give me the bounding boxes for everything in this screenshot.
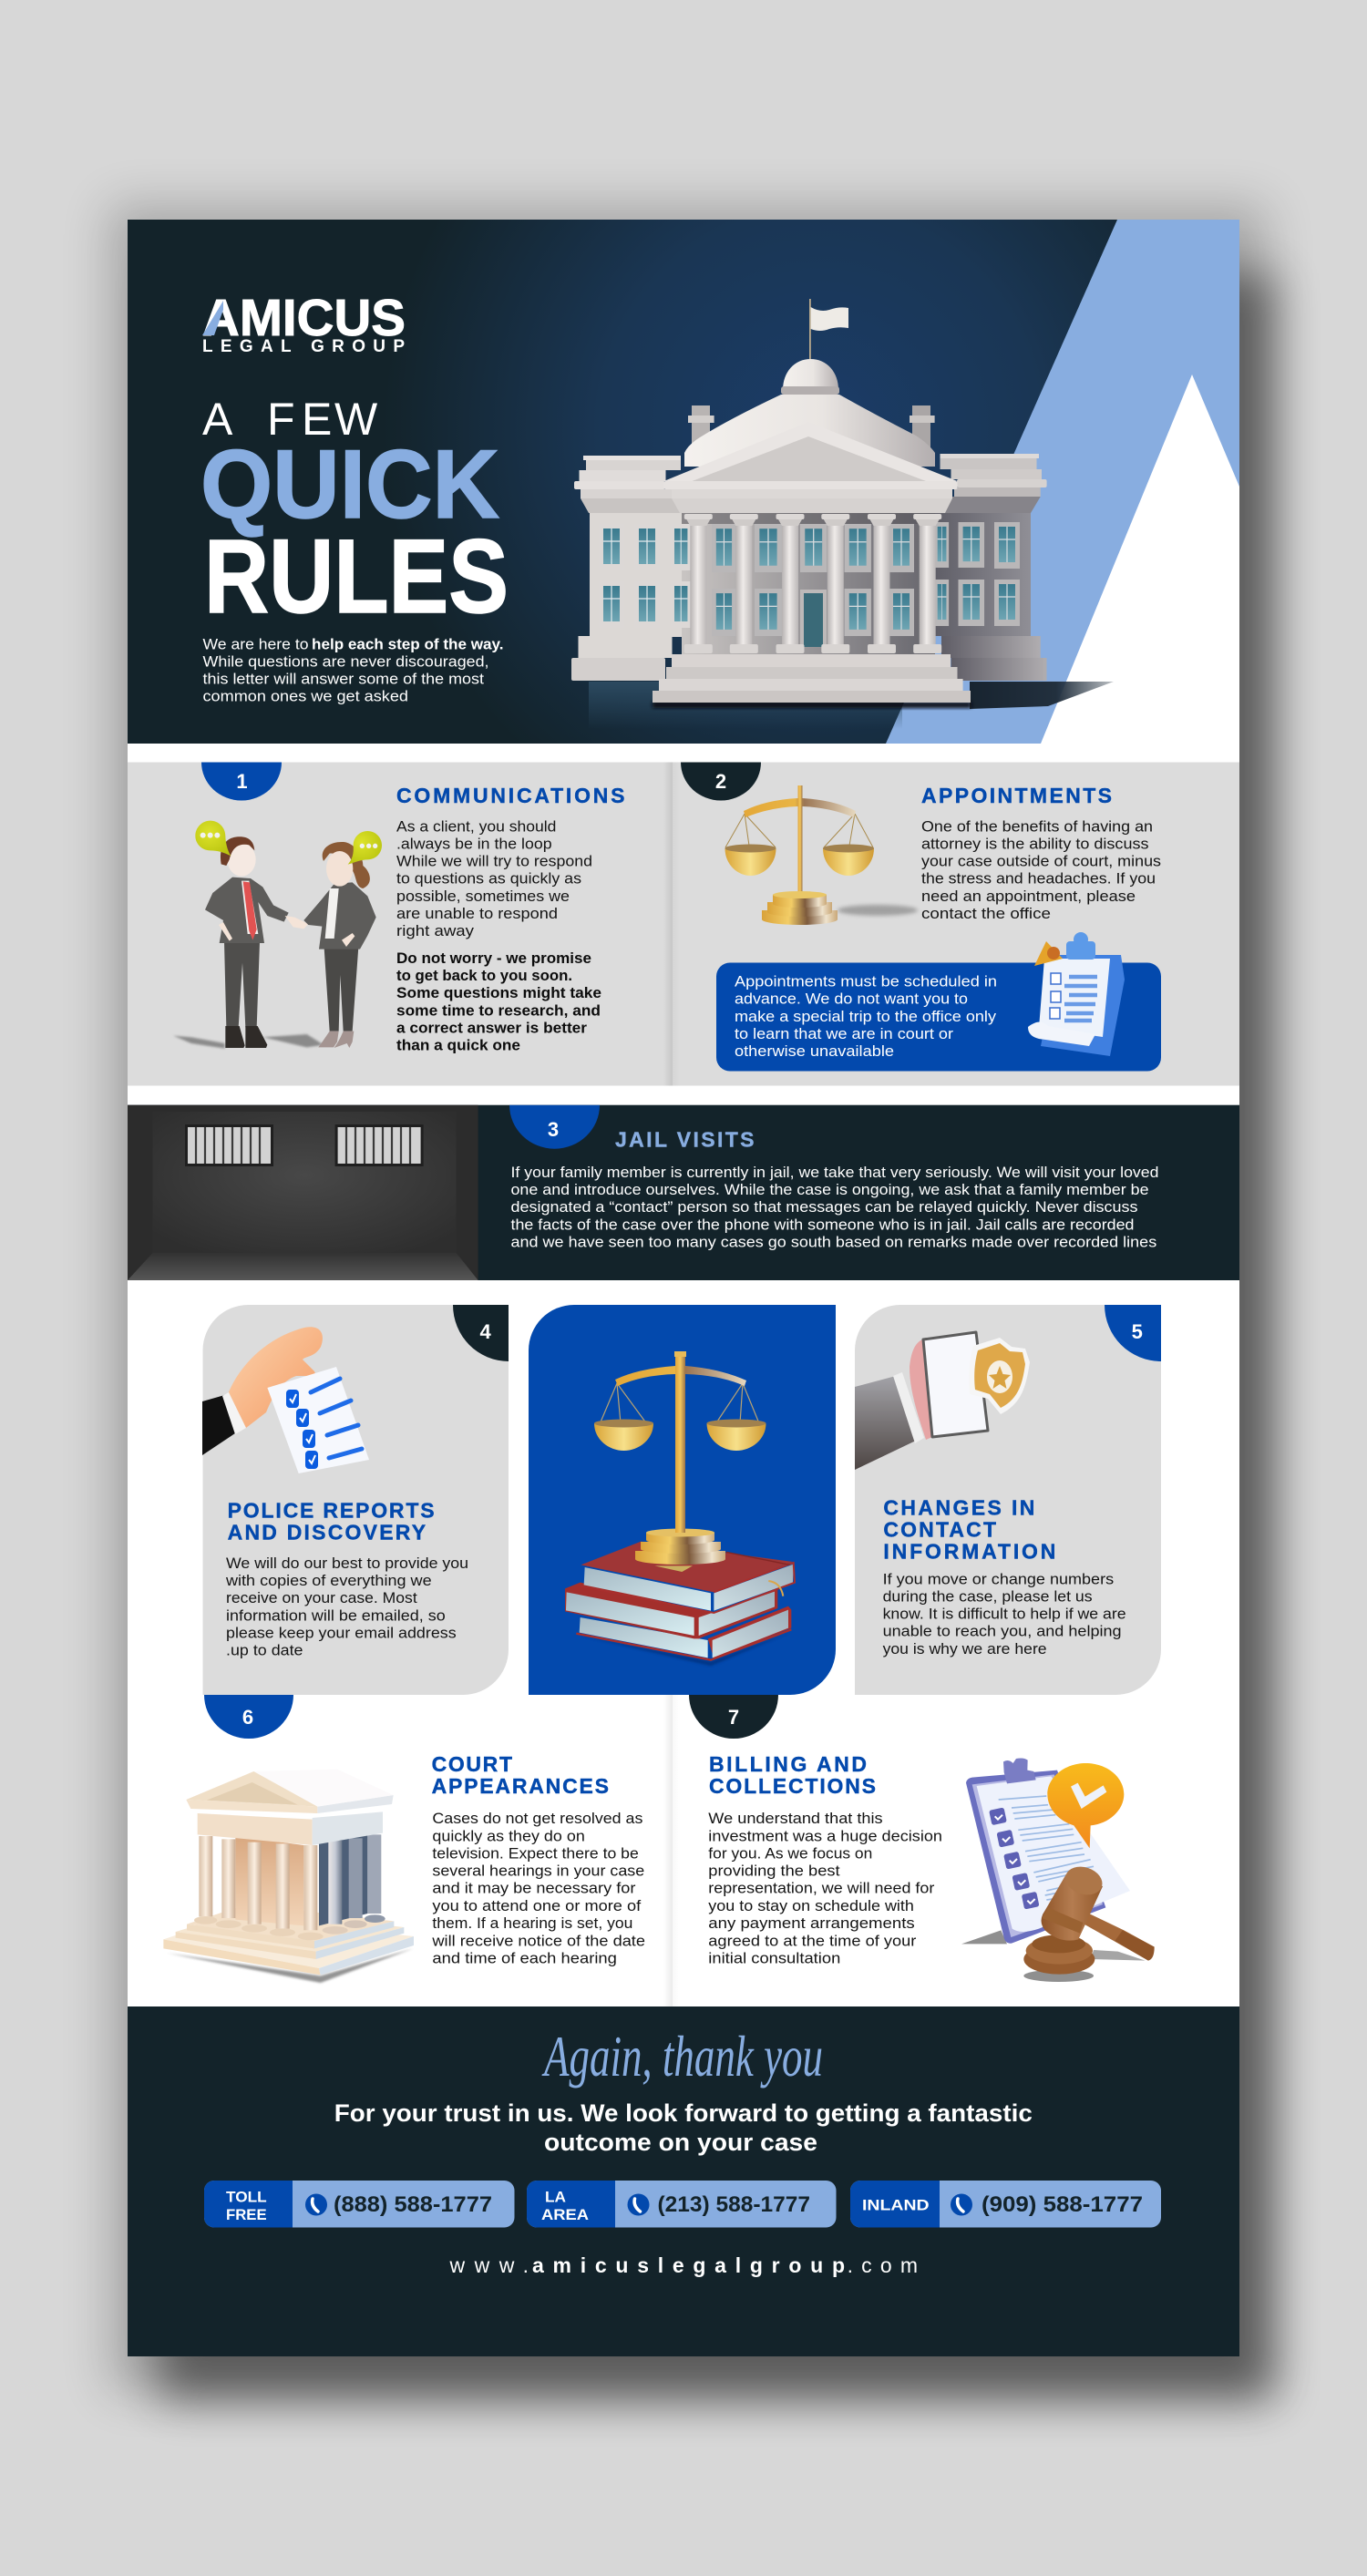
text: appointments xyxy=(921,818,1161,922)
icon: hand holding phone and badge xyxy=(855,1332,1030,1470)
badge 5: 5 xyxy=(1132,1320,1143,1343)
text: communications xyxy=(396,818,592,939)
text: appointments: contact the office xyxy=(921,906,1051,922)
intro text: While questions are never discouraged, xyxy=(202,653,488,670)
heading: police reports xyxy=(228,1499,435,1545)
heading: jail visits: JAIL VISITS xyxy=(615,1128,755,1152)
intro text: We are here to xyxy=(202,636,308,652)
text: communications: .always be in the loop xyxy=(396,836,552,852)
text: police reports: We will do our best to provide you xyxy=(226,1555,468,1572)
text: billing and collections: investment was a huge decision xyxy=(708,1828,942,1844)
text: changes in contact information: during the case, please let us xyxy=(883,1588,1093,1605)
panel: court appearances xyxy=(163,1695,680,2006)
text: court appearances: television. Expect there to be xyxy=(432,1845,639,1862)
text: police reports xyxy=(225,1555,468,1659)
heading: court appearances: COURT xyxy=(432,1752,512,1776)
white triangle xyxy=(1041,375,1239,744)
text: communications bold: Some questions might take xyxy=(396,985,601,1001)
heading: billing and collections: BILLING AND xyxy=(709,1752,867,1776)
text: communications: As a client, you should xyxy=(396,818,556,835)
icon: stacked books xyxy=(565,1542,795,1666)
badge 5 xyxy=(1105,1305,1161,1361)
text: police reports: please keep your email address xyxy=(226,1625,457,1641)
intro text: help each step of the way. xyxy=(312,636,503,652)
badge 6: 6 xyxy=(242,1706,253,1729)
phone bar: toll free: TOLL xyxy=(226,2189,267,2206)
icon: hand holding checklist xyxy=(202,1327,369,1473)
text: changes in contact information: If you move or change numbers xyxy=(883,1571,1114,1587)
text: jail visits: designated a “contact” person so that messages can be relayed quickly. Never discuss xyxy=(510,1199,1137,1216)
text: communications: While we will try to respond xyxy=(396,853,592,869)
icon: courthouse building xyxy=(571,299,1114,729)
panel: communications and appointments xyxy=(128,762,1239,1086)
icon: large scales xyxy=(594,1351,766,1565)
closing message: For your trust in us. We look forward to getting a fantastic xyxy=(334,2099,1033,2127)
intro text: common ones we get asked xyxy=(202,689,408,705)
intro text: this letter will answer some of the most xyxy=(202,671,484,687)
text: court appearances: them. If a hearing is set, you xyxy=(432,1915,632,1932)
text: billing and collections: agreed to at the time of your xyxy=(708,1933,917,1949)
text: appointments: attorney is the ability to discuss xyxy=(921,836,1148,852)
text: communications bold xyxy=(396,950,601,1054)
text: communications: are unable to respond xyxy=(396,906,558,922)
heading: court appearances xyxy=(432,1752,609,1798)
heading: changes in contact information: CHANGES IN xyxy=(883,1495,1034,1519)
badge 3: 3 xyxy=(548,1118,559,1141)
badge 1 xyxy=(201,762,282,801)
badge 1: 1 xyxy=(236,770,248,793)
text: communications: possible, sometimes we xyxy=(396,888,570,905)
text: jail visits: one and introduce ourselves. While the case is ongoing, we ask that a family member be xyxy=(510,1182,1148,1198)
light blue slanted band xyxy=(886,220,1239,744)
text: billing and collections: providing the best xyxy=(708,1863,840,1880)
badge 6 xyxy=(204,1695,293,1739)
text: communications bold: some time to research, and xyxy=(396,1002,601,1019)
text: court appearances: will receive notice of the date xyxy=(431,1933,645,1949)
icon: gold scales xyxy=(725,785,918,925)
phone bar: inland: INLAND xyxy=(862,2197,930,2214)
icon: phone xyxy=(627,2194,649,2216)
heading: police reports: AND DISCOVERY xyxy=(228,1521,426,1545)
icon: clipboard, speech bubble and gavel xyxy=(961,1758,1155,1982)
callout: appointments notice: Appointments must be scheduled in xyxy=(735,974,997,990)
phone bar: la area: LA xyxy=(545,2189,566,2206)
badge 4 xyxy=(453,1305,509,1361)
heading: changes in contact information: INFORMATION xyxy=(883,1539,1055,1563)
text: billing and collections: any payment arrangements xyxy=(708,1915,915,1932)
text: court appearances: and it may be necessary for xyxy=(432,1881,636,1897)
icon: clipboard checklist xyxy=(1028,932,1125,1056)
text: jail visits xyxy=(510,1165,1159,1250)
icon: two business people xyxy=(173,821,382,1049)
text: court appearances xyxy=(431,1811,645,1966)
phone bar: la area xyxy=(527,2181,837,2227)
text: communications: right away xyxy=(396,923,475,939)
callout: appointments notice xyxy=(716,962,1161,1072)
text: court appearances: quickly as they do on xyxy=(432,1828,585,1844)
windows xyxy=(185,1124,424,1166)
text: changes in contact information: you is why we are here xyxy=(883,1641,1047,1657)
card: changes in contact information xyxy=(855,1305,1161,1695)
website: www. xyxy=(448,2253,529,2277)
page drop shadow xyxy=(109,205,1276,2401)
callout: appointments notice: advance. We do not want you to xyxy=(735,991,968,1008)
heading: changes in contact information: CONTACT xyxy=(883,1517,996,1541)
badge 3 xyxy=(509,1105,600,1149)
white gap xyxy=(128,744,1239,2006)
phone bar: toll free: (888) 588-1777 xyxy=(334,2192,492,2217)
website: amicuslegalgroup xyxy=(532,2253,845,2277)
badge 7 xyxy=(689,1695,778,1739)
text: communications bold: to get back to you soon. xyxy=(396,968,572,984)
text: billing and collections: you to stay on schedule with xyxy=(708,1898,914,1914)
phone bar: toll free: FREE xyxy=(226,2206,267,2223)
text: police reports: with copies of everything we xyxy=(225,1573,432,1589)
phone bar: toll free xyxy=(204,2181,514,2227)
text: appointments: need an appointment, please xyxy=(921,888,1136,905)
text: billing and collections: initial consultation xyxy=(708,1950,840,1966)
text: communications bold: than a quick one xyxy=(396,1038,520,1054)
text: changes in contact information: unable to reach you, and helping xyxy=(883,1624,1122,1640)
text: court appearances: Cases do not get resolved as xyxy=(432,1811,642,1827)
text: communications bold: a correct answer is better xyxy=(396,1021,588,1037)
image: jail cell xyxy=(128,1105,478,1280)
phone bar: inland xyxy=(850,2181,1161,2227)
icon: phone xyxy=(305,2194,327,2216)
intro text xyxy=(202,636,503,705)
text: police reports: .up to date xyxy=(226,1643,303,1659)
badge 2 xyxy=(681,762,761,801)
text: changes in contact information: know. It is difficult to help if we are xyxy=(883,1606,1126,1622)
text: police reports: receive on your case. Most xyxy=(226,1590,417,1606)
text: court appearances: several hearings in your case xyxy=(432,1863,644,1880)
text: billing and collections xyxy=(708,1811,942,1966)
callout: appointments notice: otherwise unavailable xyxy=(735,1043,894,1060)
heading: a few: A FEW xyxy=(202,394,378,445)
text: jail visits: If your family member is currently in jail, we take that very seriously. We will visit your loved xyxy=(510,1165,1159,1181)
hero panel xyxy=(128,220,1239,744)
closing message: outcome on your case xyxy=(544,2129,817,2156)
heading: police reports: POLICE REPORTS xyxy=(228,1499,435,1523)
logo: LEGAL GROUP xyxy=(202,337,405,356)
text: court appearances: and time of each hearing xyxy=(432,1950,617,1966)
text: billing and collections: for you. As we focus on xyxy=(708,1845,872,1862)
heading: court appearances: APPEARANCES xyxy=(432,1774,609,1798)
icon: phone xyxy=(951,2194,972,2216)
text: police reports: information will be emailed, so xyxy=(226,1607,446,1624)
heading: communications: COMMUNICATIONS xyxy=(396,784,625,807)
panel: billing and collections xyxy=(689,1695,1155,1982)
text: appointments: your case outside of court, minus xyxy=(921,853,1161,869)
heading: billing and collections: COLLECTIONS xyxy=(709,1774,876,1798)
text: jail visits: the facts of the case over the phone with someone who is in jail. Jail calls are recorded xyxy=(510,1216,1134,1233)
website: .com xyxy=(848,2253,918,2277)
heading: changes in contact information xyxy=(883,1495,1055,1563)
callout: appointments notice: to learn that we are in court or xyxy=(735,1026,954,1042)
callout: appointments notice: make a special trip to the office only xyxy=(735,1009,997,1025)
text: changes in contact information xyxy=(883,1571,1126,1657)
card: police reports and discovery xyxy=(202,1305,509,1695)
text: court appearances: you to attend one or more of xyxy=(432,1898,642,1914)
badge 4: 4 xyxy=(479,1320,491,1343)
logo: AMICUS xyxy=(202,289,406,347)
badge 7: 7 xyxy=(728,1706,739,1729)
heading: quick: QUICK xyxy=(200,429,499,539)
text: jail visits: and we have seen too many cases go south based on remarks made over recorded lines xyxy=(510,1234,1156,1250)
heading: rules: RULES xyxy=(204,518,509,635)
panel: scales on books xyxy=(529,1305,836,1695)
heading: billing and collections xyxy=(709,1752,876,1798)
panel: jail visits xyxy=(128,1105,1239,1280)
text: billing and collections: representation, we will need for xyxy=(708,1881,935,1897)
footer panel xyxy=(128,2006,1239,2356)
closing message xyxy=(334,2099,1033,2156)
text: communications: to questions as quickly as xyxy=(396,871,581,888)
phone bar: la area: (213) 588-1777 xyxy=(658,2192,810,2217)
website xyxy=(448,2253,918,2277)
text: communications bold: Do not worry - we promise xyxy=(396,950,591,967)
script heading: again, thank you: Again, thank you xyxy=(541,2024,823,2089)
heading: appointments: APPOINTMENTS xyxy=(921,784,1112,807)
text: appointments: One of the benefits of having an xyxy=(921,818,1153,835)
text: billing and collections: We understand that this xyxy=(708,1811,883,1827)
icon: courthouse columns xyxy=(163,1770,414,1983)
text: appointments: the stress and headaches. If you xyxy=(921,871,1156,888)
phone bar: inland: (909) 588-1777 xyxy=(982,2192,1143,2217)
phone bar: la area: AREA xyxy=(541,2206,589,2223)
badge 2: 2 xyxy=(715,770,726,793)
